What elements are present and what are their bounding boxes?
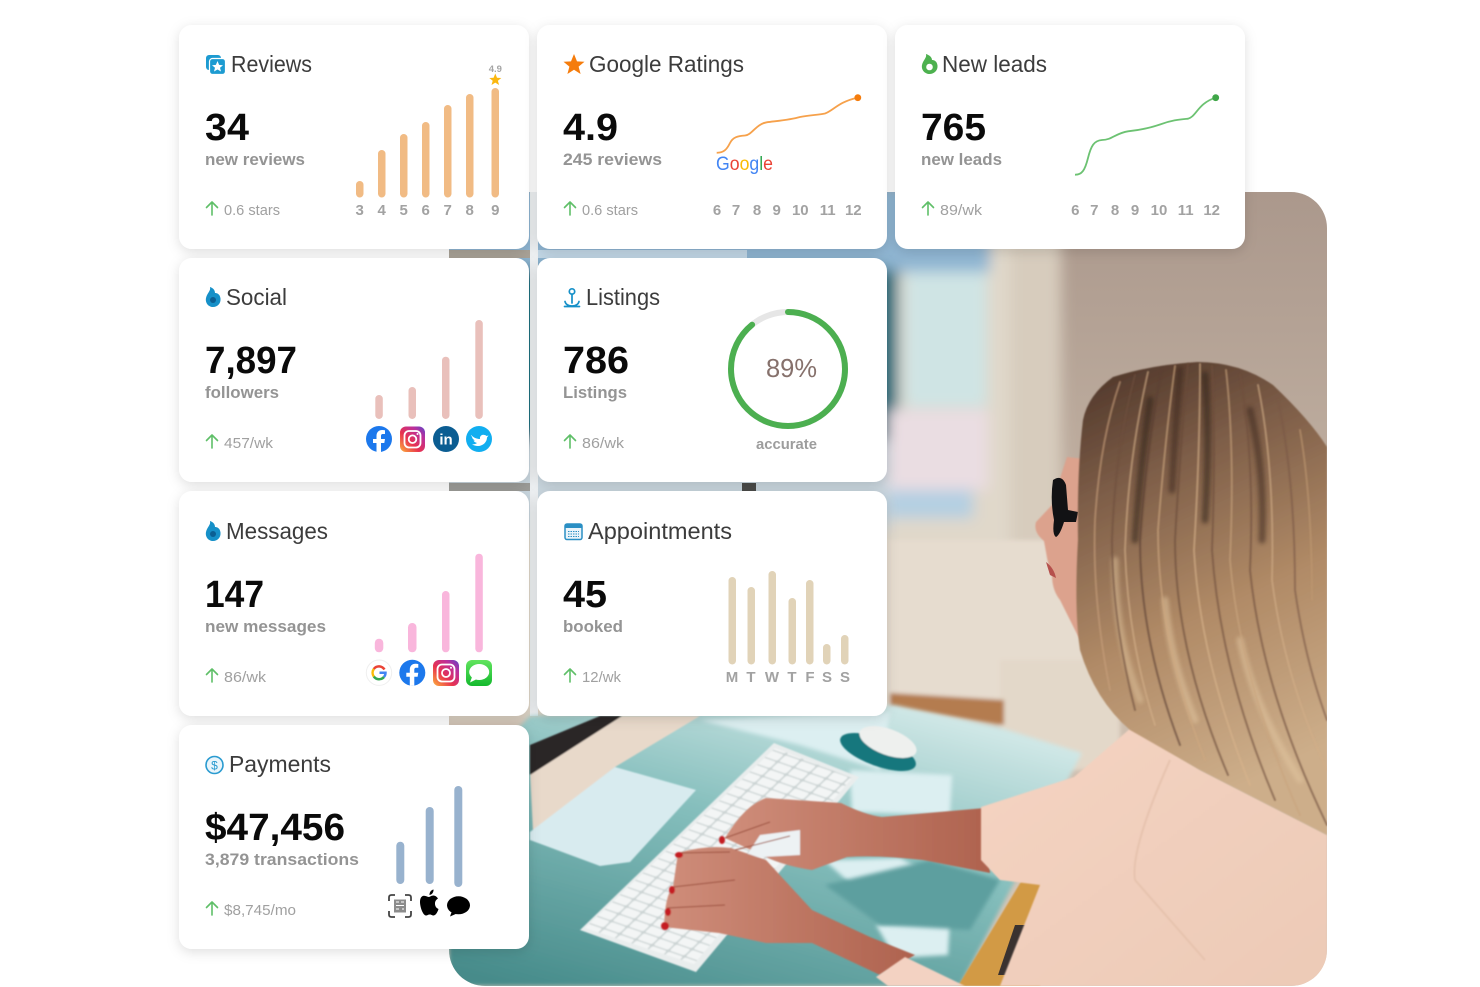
metric: 34	[205, 107, 249, 149]
axis labels: W	[765, 669, 780, 686]
window	[440, 185, 1061, 720]
desk reflections	[700, 712, 952, 958]
trend arrow	[206, 669, 218, 682]
axis labels	[356, 202, 499, 219]
line chart	[717, 94, 861, 153]
face	[1034, 457, 1080, 638]
axis labels: 6	[713, 202, 721, 219]
axis labels	[713, 202, 862, 219]
panel: Social	[179, 258, 529, 482]
metric label: 245 reviews	[563, 150, 662, 169]
axis labels: 11	[1178, 202, 1194, 219]
axis labels: 9	[773, 202, 781, 219]
axis labels: 7	[1090, 202, 1098, 219]
metric: 765	[921, 107, 986, 149]
axis labels: 12	[845, 202, 862, 219]
trend arrow	[564, 435, 576, 448]
axis labels: T	[746, 669, 756, 686]
icon: dollar coin: $	[211, 758, 218, 772]
metric: 7,897	[205, 340, 297, 382]
bar chart	[375, 554, 483, 652]
axis labels: 12	[1203, 202, 1220, 219]
mouse and pad	[839, 726, 917, 772]
heading: Reviews	[231, 51, 312, 77]
panel: Payments	[179, 725, 529, 949]
axis labels: 3	[356, 202, 364, 219]
axis labels: 6	[1071, 202, 1079, 219]
icon: instagram	[400, 426, 425, 452]
bar chart	[375, 320, 483, 419]
panel: Google Ratings	[537, 25, 887, 249]
heading: Payments	[229, 751, 331, 777]
axis labels: 9	[1131, 202, 1139, 219]
heading: Google Ratings	[589, 51, 744, 77]
lower wall and shutters	[888, 540, 1120, 770]
icon: google	[366, 660, 392, 685]
axis labels	[1071, 202, 1220, 219]
icon: facebook	[399, 660, 425, 686]
metric: $47,456	[205, 807, 345, 849]
keyboard	[580, 743, 859, 972]
trend arrow	[206, 202, 218, 215]
panel: New leads	[895, 25, 1245, 249]
metric: 4.9	[563, 107, 618, 149]
axis labels: F	[805, 669, 815, 686]
metric label: followers	[205, 383, 279, 402]
axis labels: 8	[1111, 202, 1119, 219]
axis labels: S	[822, 669, 832, 686]
axis labels: 9	[491, 202, 499, 219]
icon: orange star	[564, 54, 584, 74]
axis labels: 5	[400, 202, 408, 219]
icon: facebook	[366, 426, 392, 452]
under desk orange drawer	[958, 882, 1040, 986]
icon: reviews badge	[206, 55, 226, 74]
metric: 786	[563, 340, 629, 382]
trend text: 86/wk	[582, 436, 625, 452]
metric label: new messages	[205, 617, 326, 636]
panel: Listings	[537, 258, 887, 482]
wall	[449, 192, 1327, 986]
axis labels	[726, 669, 850, 686]
axis labels: 11	[820, 202, 836, 219]
trend arrow	[564, 669, 576, 682]
axis labels: 8	[466, 202, 474, 219]
axis labels: 6	[422, 202, 430, 219]
icon: instagram	[433, 660, 459, 686]
heading: Listings	[586, 284, 660, 310]
axis labels: 4	[378, 202, 387, 219]
icon: twitter	[466, 426, 492, 452]
trend text: 0.6 stars	[224, 203, 280, 219]
trend arrow	[206, 435, 218, 448]
icon: messages	[466, 660, 492, 686]
axis labels: S	[840, 669, 850, 686]
trend text: $8,745/mo	[224, 903, 296, 919]
hair	[1076, 362, 1327, 835]
trend text: 457/wk	[224, 436, 274, 452]
trend text: 12/wk	[582, 670, 622, 686]
trend text: 89/wk	[940, 203, 983, 219]
heading: Messages	[226, 518, 328, 544]
donut chart	[731, 312, 845, 426]
metric label: booked	[563, 617, 623, 636]
panel: Reviews	[179, 25, 529, 249]
bar chart	[728, 571, 848, 664]
metric label: new leads	[921, 150, 1002, 169]
axis labels: 7	[444, 202, 452, 219]
google logo: Google	[716, 154, 773, 175]
icon: calendar	[565, 524, 582, 540]
axis labels: 7	[732, 202, 740, 219]
panel: Messages	[179, 491, 529, 716]
icon: green flame	[922, 54, 938, 74]
axis labels: 10	[1151, 202, 1167, 219]
heading: Social	[226, 284, 287, 310]
sweater	[876, 727, 1327, 986]
metric label: 3,879 transactions	[205, 850, 359, 869]
star value: 4.9	[489, 64, 502, 75]
icon: blue flame	[206, 287, 221, 307]
axis labels: 10	[792, 202, 809, 219]
axis labels: T	[787, 669, 797, 686]
photo: woman typing at desk	[440, 185, 1327, 986]
icon: QR code scan	[389, 895, 411, 917]
bar chart	[356, 88, 499, 198]
icon: dollar coin	[206, 756, 223, 774]
trend arrow	[564, 202, 576, 215]
axis labels: 8	[753, 202, 761, 219]
line chart	[1075, 94, 1219, 175]
icon: speech bubble	[447, 896, 470, 916]
metric: 147	[205, 574, 264, 616]
bar chart	[396, 786, 462, 887]
icon: linkedin	[433, 426, 459, 452]
metric: 45	[563, 574, 607, 616]
trend text: 0.6 stars	[582, 203, 638, 219]
axis labels: M	[726, 669, 738, 686]
icon: location pin	[564, 289, 580, 306]
heading: New leads	[942, 51, 1047, 77]
metric label: Listings	[563, 383, 627, 402]
panel: Appointments	[537, 491, 887, 716]
heading: Appointments	[588, 518, 732, 544]
hands and arms	[661, 798, 990, 975]
monitor and stand	[530, 716, 700, 866]
donut chart: 89%	[766, 353, 817, 383]
icon: apple	[420, 890, 438, 916]
donut caption: accurate	[756, 436, 817, 453]
trend text: 86/wk	[224, 670, 267, 686]
metric label: new reviews	[205, 150, 305, 169]
trend arrow	[206, 902, 218, 915]
glass desk	[449, 705, 1082, 986]
trend arrow	[922, 202, 934, 215]
icon: gold star	[489, 74, 501, 85]
glasses	[1052, 478, 1078, 537]
icon: blue flame	[206, 521, 221, 541]
gap strips seen between cards	[449, 250, 531, 258]
icon: linkedin: in	[439, 432, 453, 448]
